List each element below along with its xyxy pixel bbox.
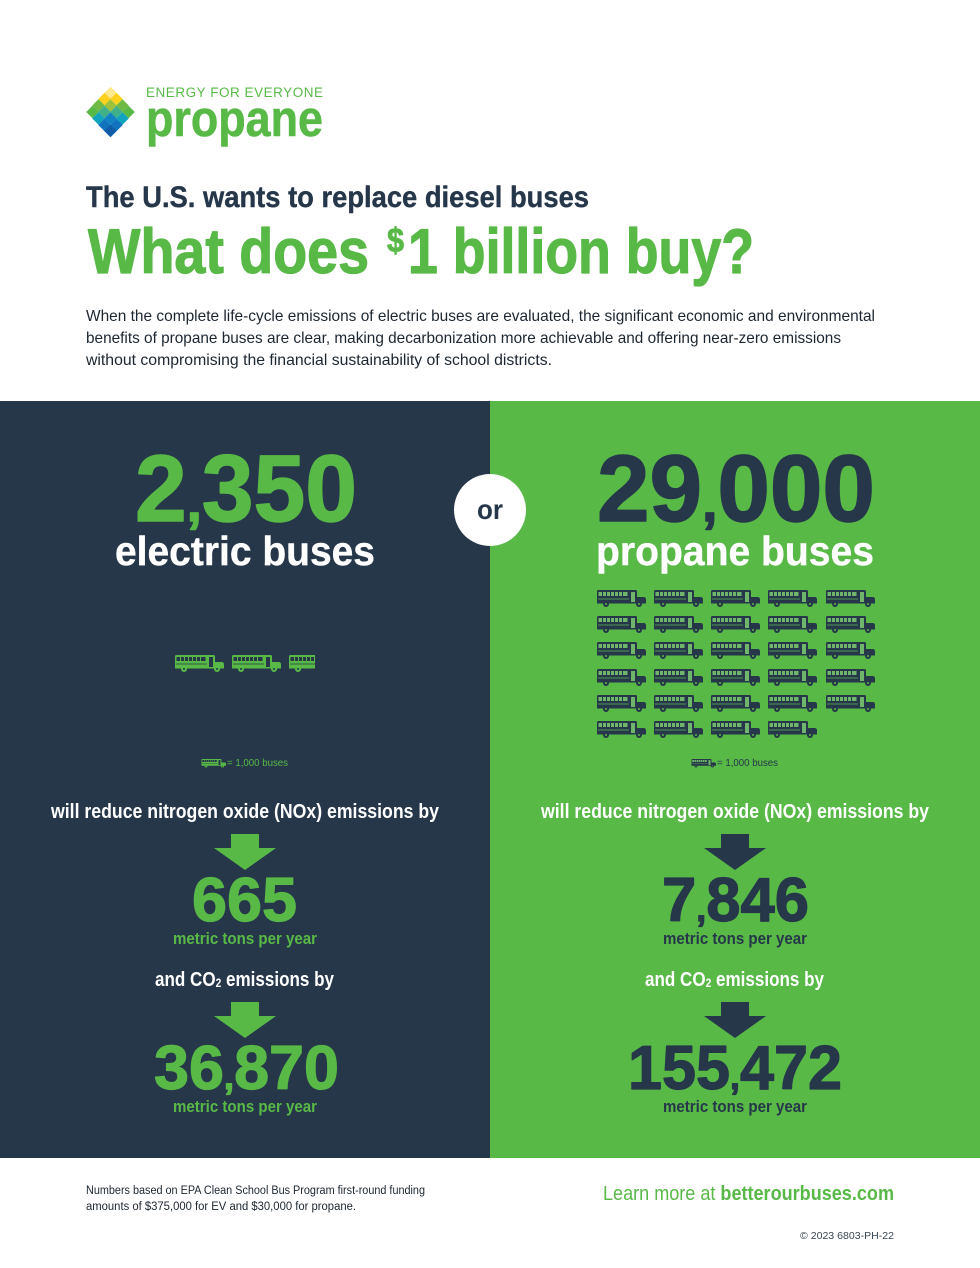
arrow: CO2 down <box>214 1002 276 1038</box>
title: $ <box>387 222 404 260</box>
propane buses heading: propane buses <box>596 528 874 574</box>
footnote <box>86 1185 425 1213</box>
call to action: Learn more at betterourbuses.com <box>603 1183 894 1205</box>
logo tagline: ENERGY FOR EVERYONE <box>146 85 323 100</box>
CO2 label: emissions by <box>221 969 335 991</box>
intro paragraph <box>85 308 875 369</box>
arrow: NOx down <box>214 834 276 870</box>
CO2 label: 2 <box>216 976 222 990</box>
NOx value: 665 <box>192 866 297 935</box>
copyright: © 2023 6803-PH-22 <box>800 1230 894 1242</box>
CO2 value: 36,870 <box>154 1034 339 1103</box>
CO2 label: and CO <box>645 969 716 991</box>
propane bus count: 29,000 <box>597 436 875 542</box>
panel: electric buses <box>0 401 490 1158</box>
CO2 value: 155,472 <box>628 1034 842 1103</box>
CO2 unit: metric tons per year <box>663 1098 808 1116</box>
electric buses heading: electric buses <box>115 528 375 574</box>
NOx label: will reduce nitrogen oxide (NOx) emissions by <box>50 801 440 823</box>
title <box>88 217 754 287</box>
CO2 label: and CO <box>155 969 226 991</box>
NOx value: 7,846 <box>662 866 809 935</box>
badge: or: or <box>477 494 503 525</box>
pictogram: propane buses <box>597 590 875 738</box>
icon: diamond logo mark <box>86 87 135 137</box>
footnote: amounts of $375,000 for EV and $30,000 for propane. <box>86 1201 356 1213</box>
logo: propane <box>86 85 323 147</box>
CO2 label: 2 <box>706 976 712 990</box>
NOx unit: metric tons per year <box>663 930 808 948</box>
pictogram: electric buses <box>175 655 338 672</box>
NOx label: will reduce nitrogen oxide (NOx) emissions by <box>540 801 930 823</box>
legend: propane <box>692 757 778 769</box>
legend: electric <box>202 757 288 769</box>
legend: propane: = 1,000 buses <box>717 757 778 769</box>
intro paragraph: without compromising the financial sustainability of school districts. <box>85 352 552 369</box>
electric bus count: 2,350 <box>135 436 357 542</box>
footnote: Numbers based on EPA Clean School Bus Program first-round funding <box>86 1185 425 1197</box>
title: 1 billion buy? <box>408 217 754 287</box>
CO2 unit: metric tons per year <box>173 1098 318 1116</box>
arrow: CO2 down <box>704 1002 766 1038</box>
title: What does <box>88 217 369 287</box>
CO2 label: emissions by <box>711 969 825 991</box>
subheading: The U.S. wants to replace diesel buses <box>86 181 589 214</box>
intro paragraph: When the complete life-cycle emissions of electric buses are evaluated, the significant economic and environmental <box>86 308 875 325</box>
arrow: NOx down <box>704 834 766 870</box>
logo wordmark: propane <box>146 90 323 147</box>
legend: electric: = 1,000 buses <box>227 757 288 769</box>
NOx unit: metric tons per year <box>173 930 318 948</box>
panel: propane buses <box>490 401 980 1158</box>
badge: or <box>454 474 526 546</box>
intro paragraph: benefits of propane buses are clear, making decarbonization more achievable and offering near-zero emissions <box>86 330 841 347</box>
